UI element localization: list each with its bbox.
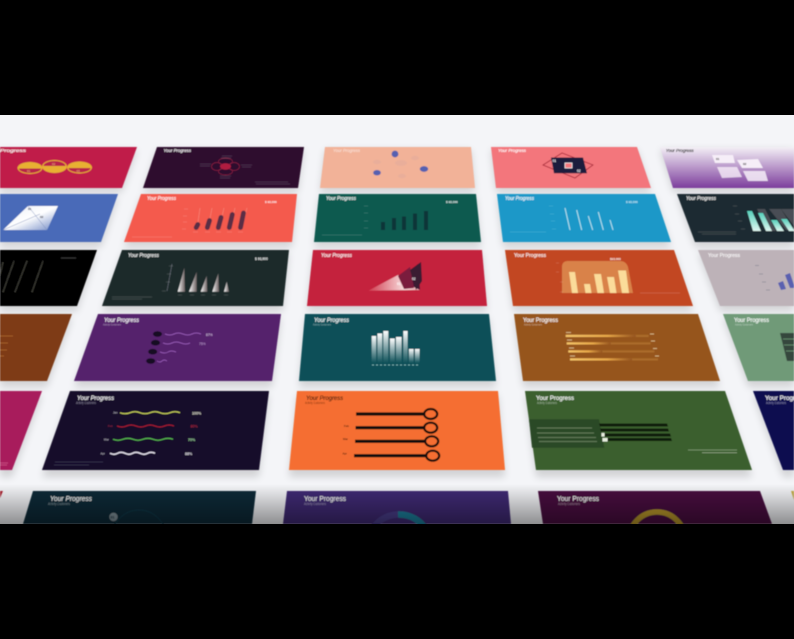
top black band [0, 0, 794, 115]
title: Your Progress [321, 253, 352, 259]
panel: wine gold donut slide [538, 491, 772, 568]
panel: dark teal donut slide: 01 [110, 516, 114, 520]
panel: crimson rings slide [0, 147, 137, 188]
title: Your Progress [147, 196, 176, 202]
panel: red triangle slide: 01 [397, 282, 401, 286]
lollipop bars [354, 414, 426, 456]
subtitle: Activity Customers [537, 401, 557, 405]
radial diagram [212, 158, 240, 175]
circle icons [373, 151, 428, 175]
title: Your Progress [686, 196, 716, 202]
panel: coral bar chart slide [124, 194, 297, 242]
month labels: Apr [100, 452, 105, 456]
bars [197, 208, 247, 229]
gradient bars [372, 331, 420, 363]
three linked rings [18, 160, 92, 174]
value: $ 93,000 [446, 200, 458, 204]
progress bars [566, 335, 658, 360]
month labels: Feb [108, 424, 113, 428]
percentages: 88% [185, 452, 193, 456]
panel: sliver right row six [791, 491, 794, 500]
panel: coral diamond slide [491, 147, 651, 188]
diamond graphic [543, 153, 593, 178]
title: Your Progress [304, 496, 346, 503]
panel: coral diamond slide: 02 [577, 169, 581, 173]
pills [146, 331, 162, 364]
month labels: Mar [104, 438, 109, 442]
panel: burnt orange bar chart slide [505, 250, 693, 306]
subtitle: Activity Customers [766, 401, 786, 405]
black bars [599, 424, 672, 441]
chart background [562, 261, 633, 293]
panel: dark plum radial slide [143, 147, 304, 188]
panel: amber progress bars slide [514, 314, 720, 381]
waves [157, 333, 201, 362]
title: Your Progress [523, 318, 558, 324]
background floor [0, 115, 794, 524]
bottom fade [0, 484, 794, 524]
panel: blue polygon slide: 01 [28, 207, 32, 211]
panel: grey-mauve bar slide [698, 250, 794, 306]
value: $ 93,000 [255, 257, 268, 261]
bars [569, 270, 629, 293]
panel: peach icons slide [320, 147, 475, 188]
panel: blue polygon slide: 02 [40, 215, 44, 219]
title: Your Progress [164, 148, 192, 153]
percentages: 70% [188, 438, 196, 442]
panel: charcoal teal 3D bars slide [677, 194, 794, 242]
subtitle: Activity Customers [75, 401, 96, 405]
panel: crimson rings slide: 02 [52, 162, 56, 166]
panel: magenta slide [0, 391, 42, 470]
panel: rust slide [0, 314, 72, 381]
panel: violet donut slide [283, 491, 511, 532]
title: Your Progress [536, 395, 575, 402]
percentages: 100% [192, 412, 202, 416]
panel: purple wave slide [74, 314, 281, 381]
donut segment [109, 513, 118, 521]
panel: coral diamond slide: 01 [552, 159, 556, 163]
labels: Apr [342, 452, 347, 456]
panel: deep teal gradient bars slide [299, 314, 496, 381]
four white cards [712, 155, 768, 181]
dark table [780, 333, 794, 361]
panel: blue polygon slide [0, 194, 118, 242]
panel: dark teal donut slide [23, 491, 256, 570]
donut [398, 514, 426, 530]
title: Your Progress [734, 318, 769, 324]
value: $ 93,000 [626, 200, 638, 204]
gradient triangle [368, 275, 420, 291]
month labels [100, 410, 118, 456]
slider lines [537, 428, 597, 442]
panel: purple gradient cards slide: 01 [716, 157, 720, 161]
subtitle: Activity Customers [735, 322, 753, 326]
panel: cyan line chart slide [497, 194, 671, 242]
value: $ 93,000 [265, 200, 277, 204]
panel: navy slide [753, 391, 794, 470]
panel: orange lollipop slide [289, 391, 505, 470]
title: Your Progress [557, 496, 599, 503]
panel: purple gradient cards slide [660, 147, 794, 188]
panel: black slide [0, 250, 97, 306]
percentages: 87% [206, 333, 213, 337]
title: Your Progress [50, 496, 92, 503]
teal front bars [747, 211, 794, 231]
panel: crimson rings slide: 01 [27, 169, 31, 173]
title: Progress [0, 148, 27, 153]
subtitle: Activity Customers [524, 322, 542, 326]
bottom black band [0, 524, 794, 639]
percentages [185, 412, 202, 456]
labels: Mar [343, 437, 348, 441]
faint bars [0, 336, 13, 356]
title: Your Progress [314, 318, 349, 324]
panel: red triangle slide [307, 250, 487, 306]
labels: Feb [344, 424, 349, 428]
title: Your Progress [104, 318, 139, 324]
panel: sliver left row six [0, 491, 3, 498]
title: Your Progress [514, 253, 546, 259]
panel: sage green slide [723, 314, 794, 381]
faint bars [0, 261, 43, 292]
glowing waves [110, 412, 180, 454]
value: $93,000 [610, 257, 621, 261]
panel: purple gradient cards slide: 02 [743, 162, 747, 166]
thin bars [565, 208, 613, 230]
title: Your Progress [498, 148, 527, 153]
cone chart [178, 268, 229, 292]
subtitle: Activity Customers [102, 322, 121, 326]
white polygon [3, 206, 58, 230]
panel: purple wave slide: 75% [199, 342, 206, 346]
subtitle: Activity Customers [558, 502, 580, 506]
panel: crimson rings slide: 03 [76, 169, 80, 173]
dark fan [398, 262, 422, 290]
title: Your Progress [505, 196, 534, 202]
percentages: 80% [190, 424, 198, 428]
panel: forest green slider slide [525, 391, 752, 470]
panel shadows [0, 150, 794, 477]
title: Your Progress [128, 253, 159, 259]
title: Your Progress [77, 395, 115, 402]
month labels: Jan [113, 410, 118, 414]
subtitle: Activity Customers [305, 401, 325, 405]
labels [342, 424, 349, 456]
subtitle: Activity Customers [313, 322, 331, 326]
panel: teal bar chart slide [314, 194, 481, 242]
bars [381, 211, 428, 230]
panel: midnight glowing waves slide [42, 391, 269, 470]
blue bars [778, 273, 794, 290]
title: Your Progress [306, 395, 344, 402]
title: Your Progress [326, 196, 356, 202]
grey back bars [757, 209, 794, 231]
panel: red triangle slide: 02 [412, 277, 416, 281]
subtitle: Activity Customers [304, 502, 326, 506]
title: Your Progress [666, 148, 694, 153]
labels [566, 332, 659, 356]
title: Your Progress [333, 148, 361, 153]
subtitle: Activity Customers [47, 502, 70, 506]
panel: dark green cones slide [102, 250, 289, 306]
gold donut [629, 512, 685, 568]
dark overlay [529, 419, 604, 448]
slider handles [602, 433, 608, 442]
title: Your Progress [708, 253, 740, 259]
